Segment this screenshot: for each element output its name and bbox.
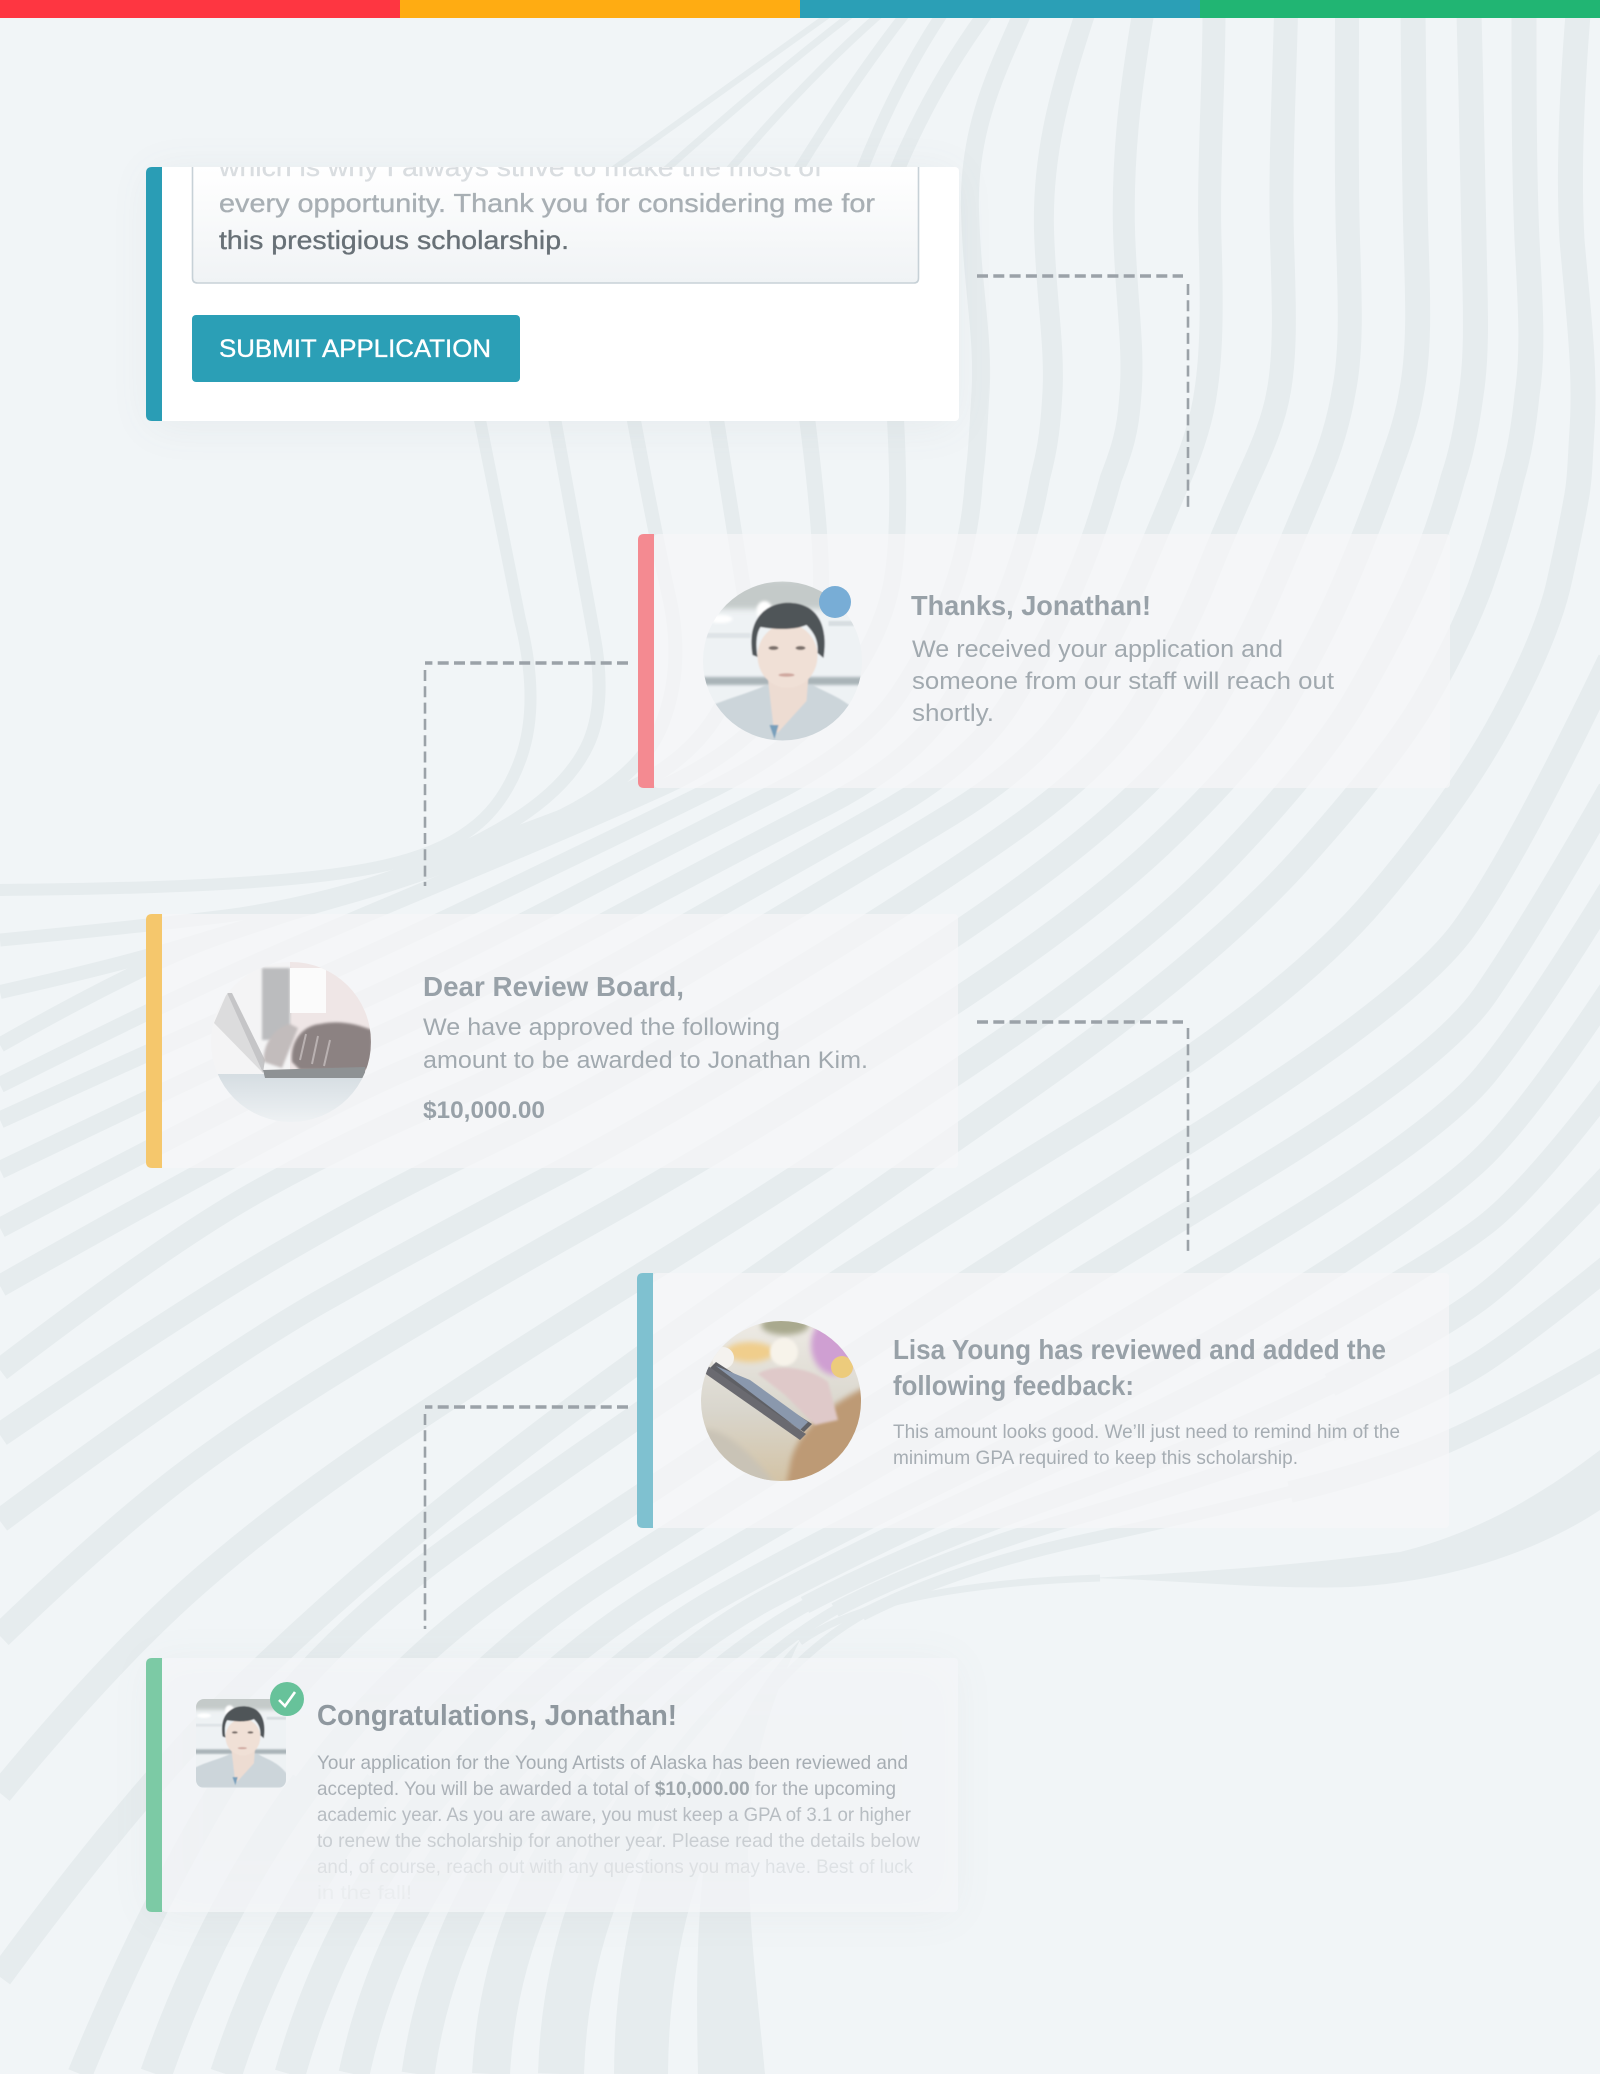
textarea with essay text: which is why I always strive to make the most of <box>218 152 823 182</box>
submit button: SUBMIT APPLICATION <box>219 335 491 363</box>
icon: phone photo <box>701 1321 861 1481</box>
message: We received your application and <box>912 636 1283 663</box>
message: someone from our staff will reach out <box>912 668 1334 695</box>
letter body with fade: Your application for the Young Artists of Alaska has been reviewed and <box>317 1752 908 1774</box>
heading: following feedback: <box>893 1370 1134 1401</box>
textarea with essay text: this prestigious scholarship. <box>219 225 569 255</box>
icon: laptop photo <box>214 962 371 1120</box>
letter body with fade: in the fall! <box>317 1882 412 1904</box>
heading: Congratulations, Jonathan! <box>317 1700 677 1732</box>
heading: Dear Review Board, <box>423 971 684 1002</box>
letter body with fade <box>317 1752 921 1904</box>
letter body with fade: and, of course, reach out with any questions you may have. Best of luck <box>317 1856 913 1878</box>
panel: thanks card <box>638 534 1450 788</box>
panel: feedback card <box>637 1273 1449 1528</box>
icon: applicant photo <box>700 579 864 743</box>
icon: blue status dot <box>819 586 851 618</box>
textarea with essay text: every opportunity. Thank you for considering me for <box>219 188 875 218</box>
feedback message: minimum GPA required to keep this scholarship. <box>893 1447 1298 1469</box>
message: shortly. <box>912 700 994 727</box>
textarea with essay text <box>192 167 920 284</box>
arrow: connector from form to thanks card <box>977 276 1188 507</box>
icon: applicant portrait <box>196 1699 286 1788</box>
message <box>912 636 1334 727</box>
submit button <box>192 315 520 382</box>
message <box>423 1014 868 1074</box>
panel: review board card <box>146 914 958 1168</box>
top colour bar <box>0 0 1600 18</box>
letter body with fade: to renew the scholarship for another year. Please read the details below <box>317 1830 921 1852</box>
icon: green check badge <box>270 1682 304 1716</box>
letter body with fade: accepted. You will be awarded a total of $10,000.00 for the upcoming <box>317 1778 896 1800</box>
letter body with fade: academic year. As you are aware, you must keep a GPA of 3.1 or higher <box>317 1804 911 1826</box>
message: amount to be awarded to Jonathan Kim. <box>423 1047 868 1074</box>
heading: Lisa Young has reviewed and added the <box>893 1334 1386 1365</box>
arrow: connector from thanks card to review board card <box>425 663 628 886</box>
panel: application form card <box>146 152 959 426</box>
heading: Thanks, Jonathan! <box>911 590 1151 621</box>
heading <box>893 1334 1386 1401</box>
feedback message: This amount looks good. We’ll just need to remind him of the <box>893 1421 1400 1443</box>
feedback message <box>893 1421 1400 1469</box>
message: We have approved the following <box>423 1014 780 1041</box>
arrow: connector from review board card to feedback card <box>977 1022 1188 1251</box>
award amount: $10,000.00 <box>423 1097 545 1124</box>
arrow: connector from feedback card to congratulations card <box>425 1407 628 1629</box>
panel: congratulations card <box>146 1658 958 1914</box>
